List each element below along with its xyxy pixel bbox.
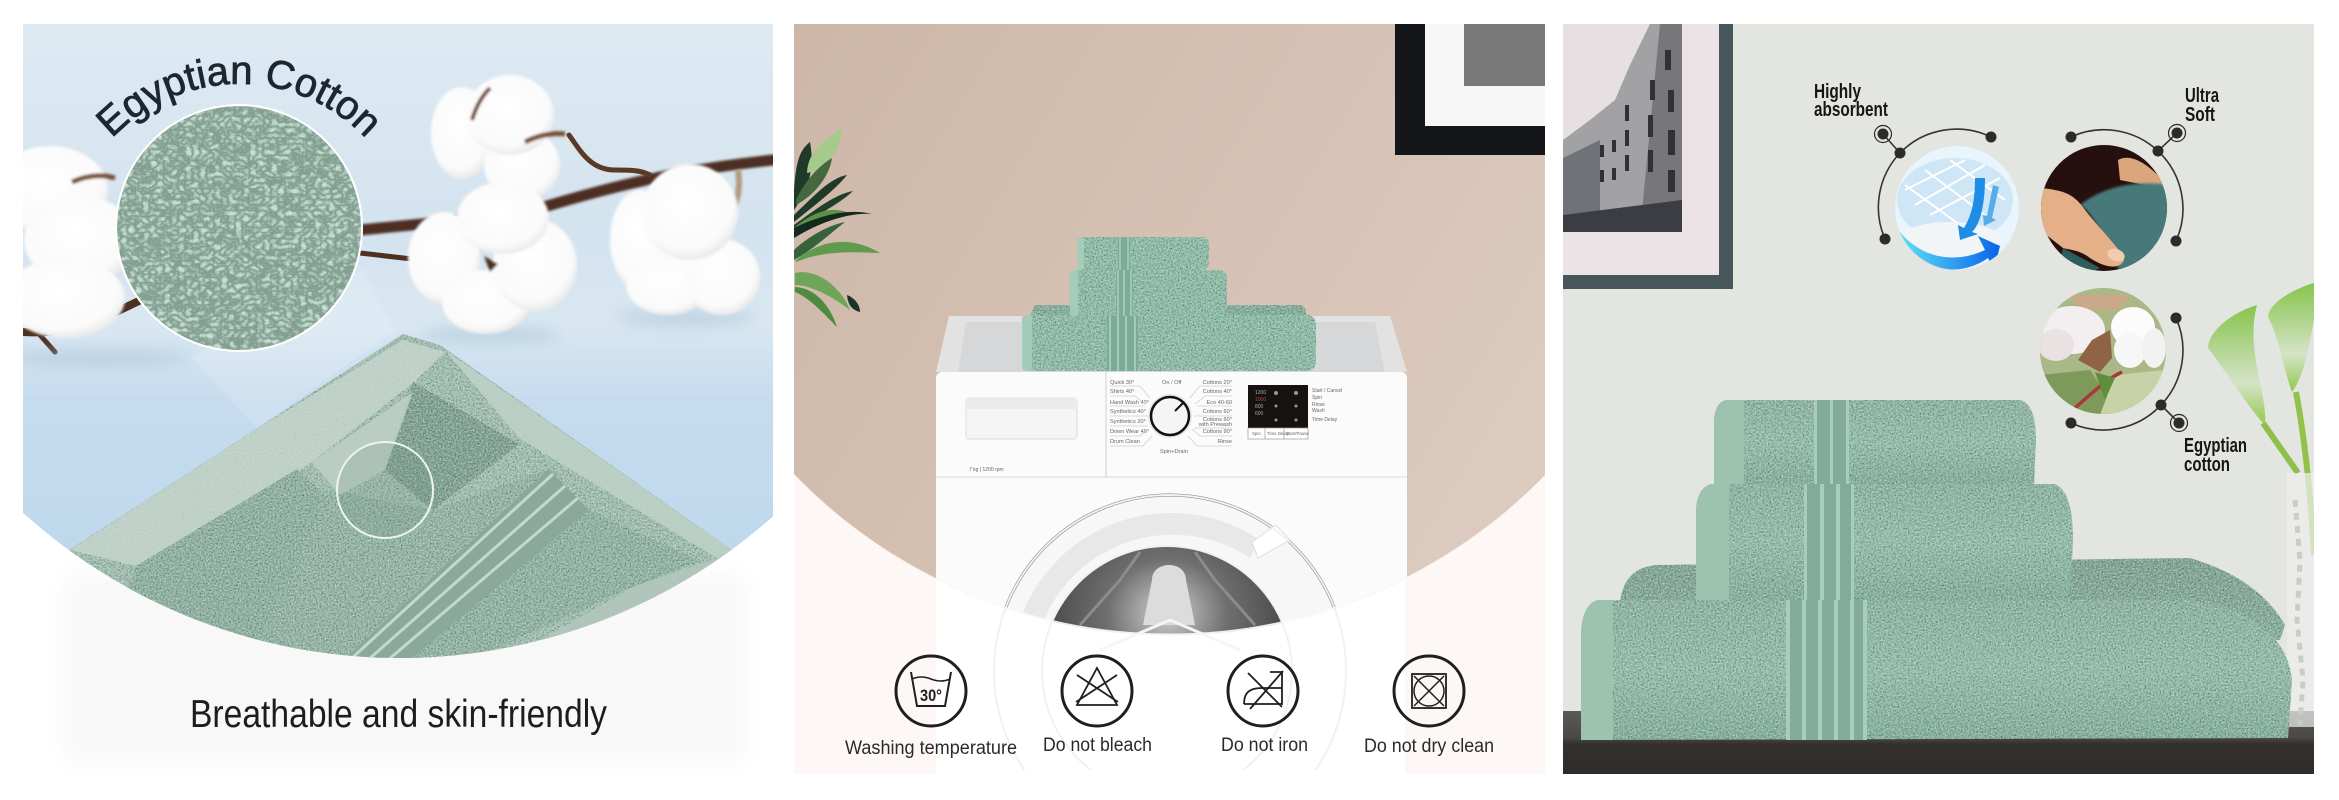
function labels (1312, 388, 1342, 423)
icon: do not iron (1228, 656, 1298, 726)
picture frame (1395, 24, 1545, 155)
washing machine (936, 316, 1407, 634)
program labels right: with Prewash (1198, 422, 1232, 428)
program labels left: Synthetics 40° (1110, 409, 1146, 415)
display: 1000 (1255, 397, 1266, 403)
display: 600 (1255, 411, 1264, 417)
function labels: Spin (1312, 395, 1322, 401)
label: Ultra Soft: Soft (2185, 104, 2215, 126)
program labels right (1198, 380, 1232, 445)
medium towel (1696, 484, 2073, 600)
callout: Highly absorbent (1874, 126, 2019, 270)
icon: washing temperature: 30° (920, 686, 942, 705)
program labels right: Cottons 20° (1203, 380, 1232, 386)
cotton boll: top center (431, 75, 565, 201)
label: Egyptian cotton: cotton (2184, 454, 2230, 476)
calla lily plant (2208, 283, 2314, 555)
label: Washing temperature: Washing temperature (845, 738, 1017, 759)
program labels right: Eco 40-60 (1206, 400, 1232, 406)
icon: do not bleach (1062, 656, 1132, 726)
large towel (1581, 558, 2292, 740)
callout: Ultra Soft (2040, 124, 2186, 275)
function labels: Start / Cancel (1312, 388, 1342, 394)
label: Highly absorbent: Highly (1814, 81, 1862, 103)
towel corner (60, 334, 735, 680)
program labels left: Shirts 40° (1110, 389, 1134, 395)
soft shadows under bolls (10, 310, 755, 366)
callout: Egyptian cotton (2038, 288, 2188, 432)
program labels left: Hand Wash 40° (1110, 400, 1149, 406)
label: Do not iron: Do not iron (1221, 735, 1308, 756)
heading: Egyptian Cotton: Egyptian Cotton (95, 58, 377, 138)
small towel (1714, 400, 2036, 484)
label: Do not bleach: Do not bleach (1043, 735, 1152, 756)
function labels: Time Delay (1312, 417, 1338, 423)
cotton branch (23, 135, 773, 352)
faint lower fade panel (113, 579, 540, 650)
panel: care instructions (794, 24, 1545, 774)
program labels left: Down Wear 40° (1110, 429, 1149, 435)
program labels left: Quick 30° (1110, 380, 1134, 386)
program labels left: Drum Clean (1110, 439, 1140, 445)
light beam (224, 391, 308, 428)
capacity label: 7 kg | 1200 rpm (969, 467, 1004, 473)
program labels left (1110, 380, 1188, 455)
icon: washing temperature (896, 656, 966, 726)
program labels right: Cottons 90° (1203, 429, 1232, 435)
caption: Breathable and skin-friendly: Breathable and skin-friendly (190, 693, 607, 736)
absorbent layer image (1895, 146, 2019, 270)
towel stack: panel 2 (1022, 237, 1316, 371)
glass vase (2287, 473, 2314, 727)
program labels right: Cottons 60° (1203, 417, 1232, 423)
table (1563, 711, 2314, 774)
label: Do not dry clean: Do not dry clean (1364, 736, 1494, 757)
label: Egyptian cotton: Egyptian (2184, 435, 2247, 457)
cotton boll: left (23, 145, 126, 338)
small magnifier ring (337, 442, 433, 538)
program labels left: On / Off (1162, 380, 1182, 386)
function labels: Wash (1312, 408, 1325, 414)
plant (794, 128, 880, 327)
display (1248, 385, 1309, 439)
panel: towel set features (1563, 24, 2314, 774)
display: Spin (1252, 431, 1261, 436)
cotton boll: right (610, 164, 760, 315)
door (1004, 494, 1336, 634)
framed photograph (1563, 24, 1733, 289)
dial (1148, 394, 1192, 438)
label: Ultra Soft: Ultra (2185, 85, 2220, 107)
display: Time Delay (1267, 431, 1290, 436)
display: 800 (1255, 404, 1264, 410)
magnified terry circle (115, 104, 363, 352)
function labels: Rinse (1312, 402, 1325, 408)
panel: Egyptian cotton close-up (23, 24, 773, 735)
display: Start/Pause (1286, 431, 1309, 436)
program labels right: Rinse (1218, 439, 1232, 445)
icon: do not dry clean (1394, 656, 1464, 726)
hand on towel image (2040, 145, 2170, 275)
display: 1200 (1255, 390, 1266, 396)
detergent drawer (966, 398, 1077, 439)
white lower overlay (794, 474, 1546, 774)
program labels left: Spin+Drain (1160, 449, 1188, 455)
program labels right: Cottons 40° (1203, 389, 1232, 395)
cotton plant image (2038, 288, 2166, 415)
cotton boll: center (408, 182, 577, 334)
label: Highly absorbent: absorbent (1814, 99, 1888, 121)
program labels right: Cottons 60° (1203, 409, 1232, 415)
program labels left: Synthetics 20° (1110, 419, 1146, 425)
